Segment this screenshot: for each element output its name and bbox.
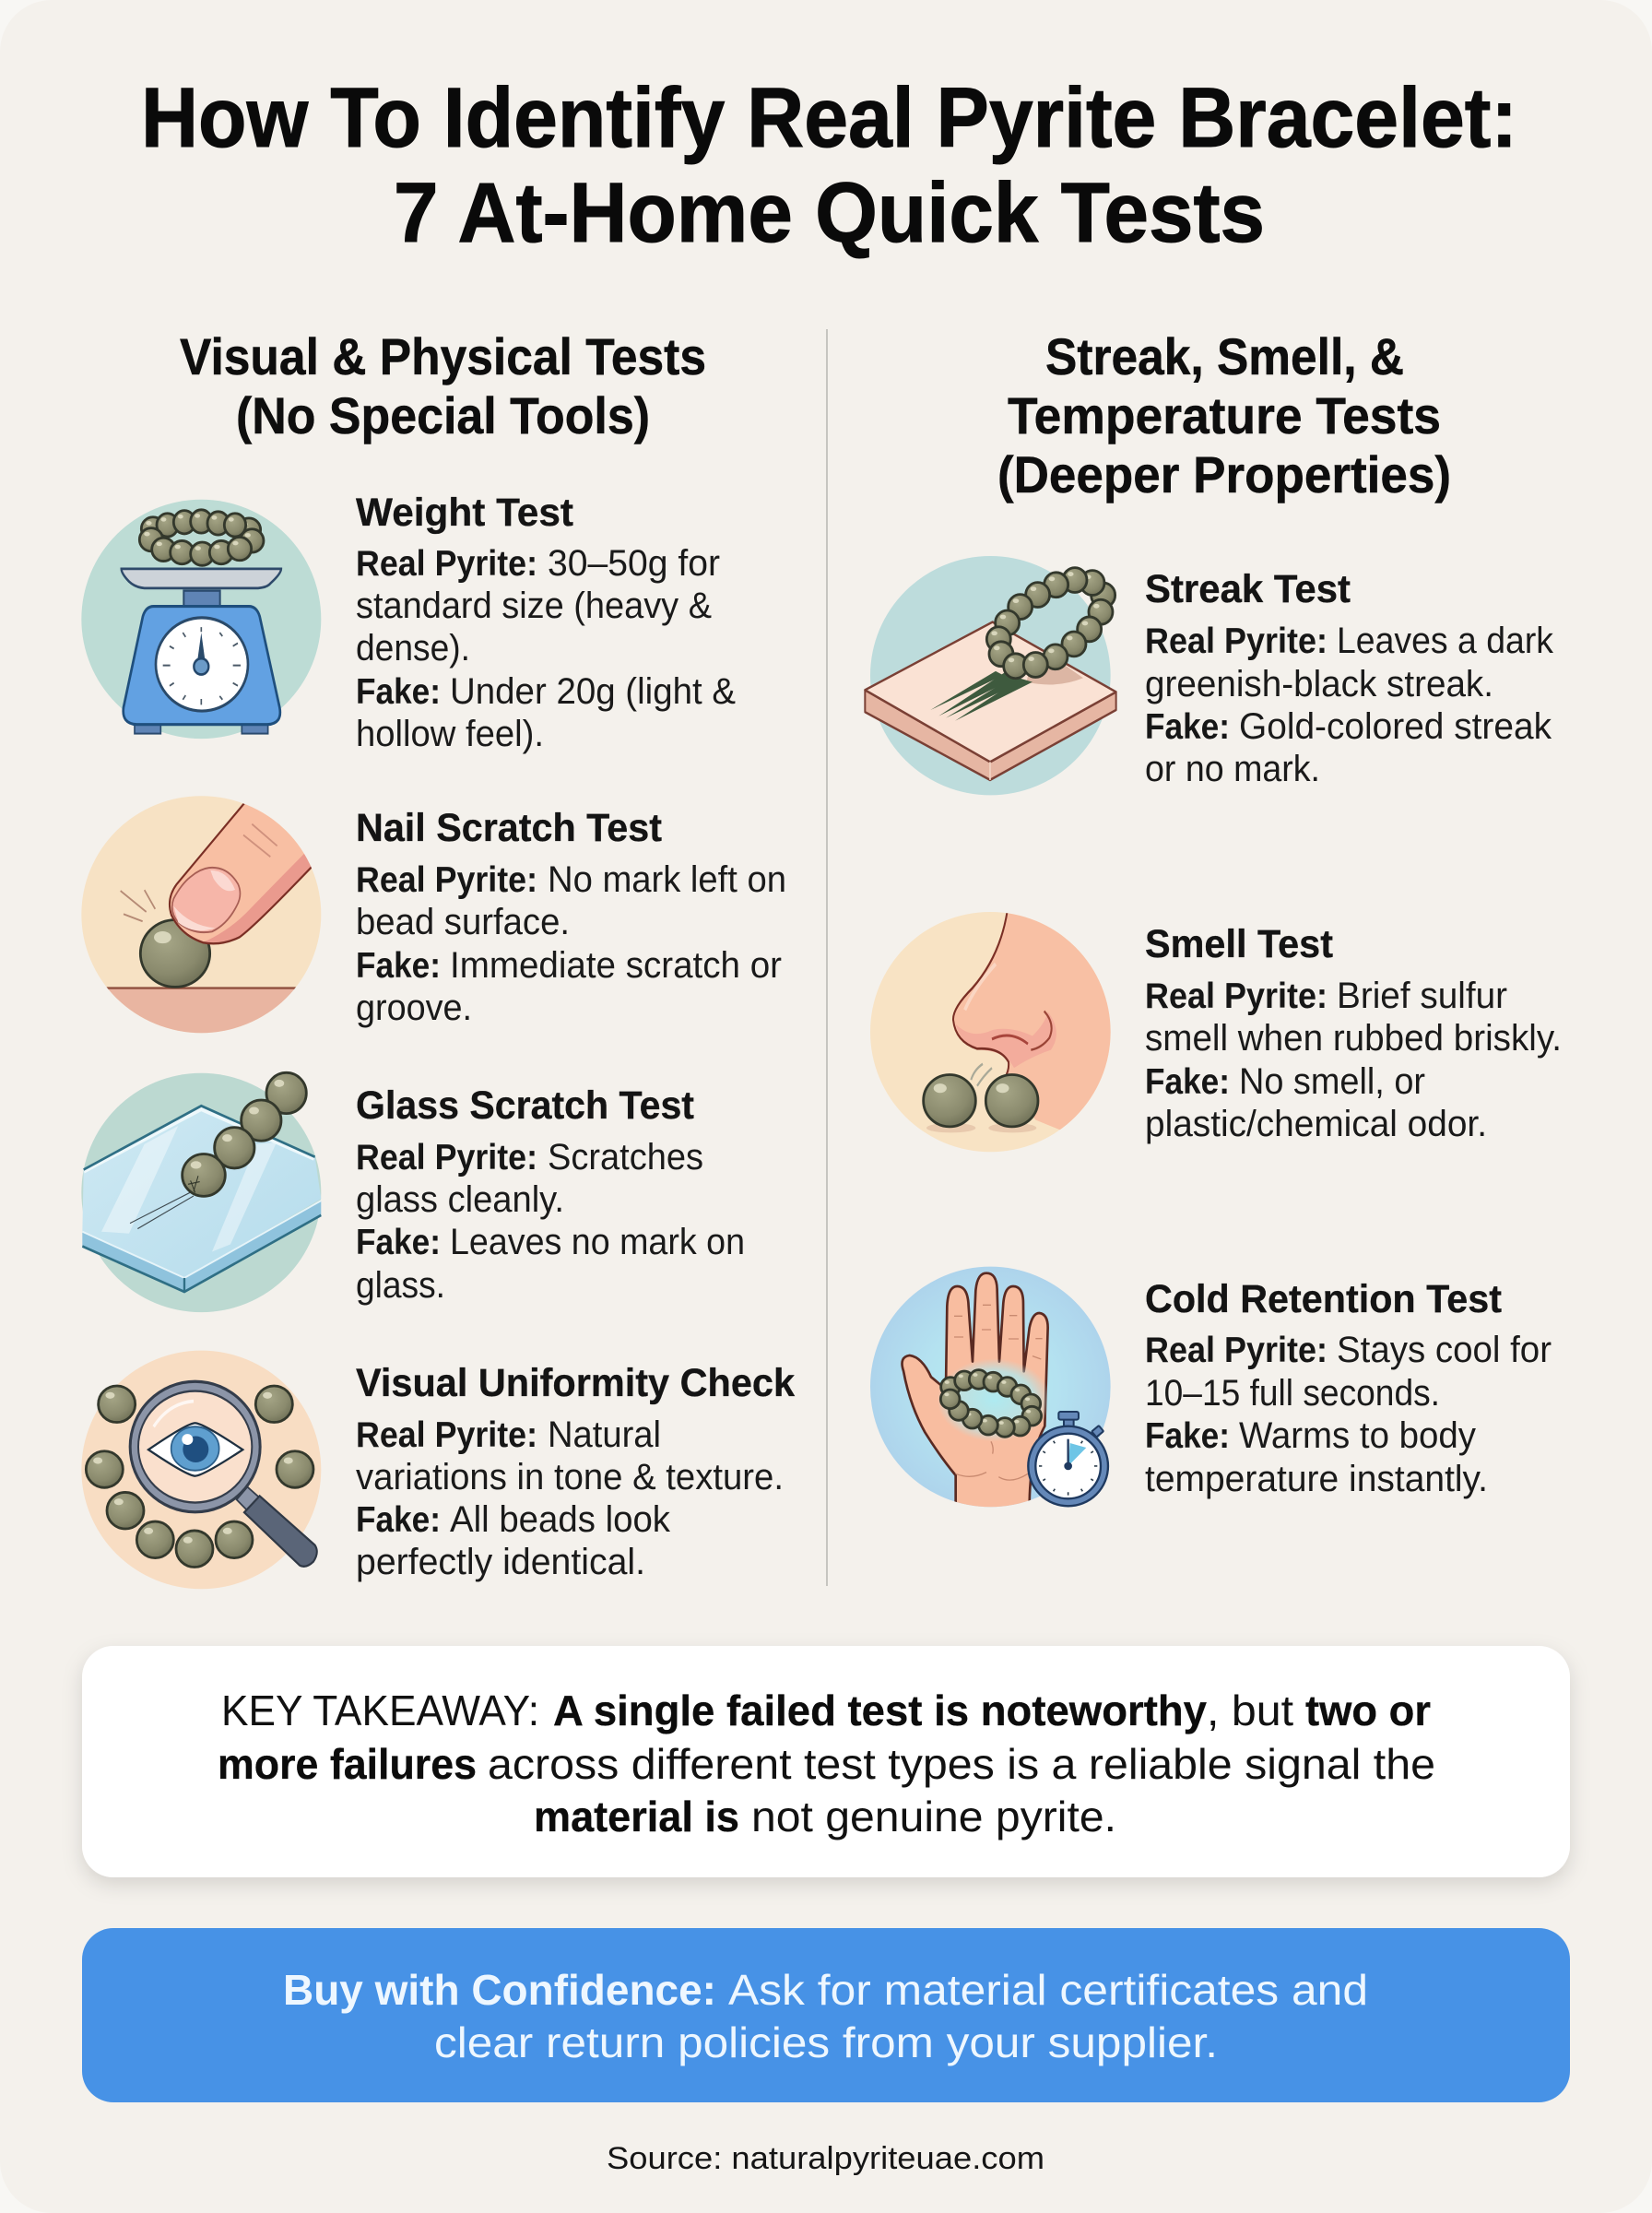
heading: left column: Visual & Physical Tests	[180, 327, 706, 385]
text: streak test: Gold-colored streak	[1239, 706, 1552, 747]
callout: key takeaway: KEY TAKEAWAY:	[221, 1686, 539, 1734]
callout: key takeaway: two or	[1305, 1686, 1431, 1734]
title: How To Identify Real Pyrite Bracelet:	[141, 71, 1517, 165]
text: glass scratch test: Fake:	[356, 1223, 441, 1262]
text: glass scratch test: glass cleanly.	[356, 1179, 564, 1220]
heading: left column	[180, 327, 706, 444]
text: visual uniformity check: Fake:	[356, 1500, 441, 1540]
text: weight test	[356, 491, 736, 754]
text: visual uniformity check: All beads look	[450, 1499, 671, 1540]
text: glass scratch test: Leaves no mark on	[450, 1222, 745, 1262]
icon: bracelet leaving a streak on a tile	[865, 556, 1116, 795]
text: streak test: Fake:	[1145, 707, 1230, 747]
icon: beads scratching glass	[81, 1072, 321, 1312]
text: visual uniformity check: Visual Uniformity Check	[356, 1361, 795, 1405]
text: streak test: Real Pyrite:	[1145, 621, 1328, 661]
callout: key takeaway: material is	[534, 1793, 739, 1840]
callout: key takeaway: not genuine pyrite.	[751, 1793, 1116, 1840]
callout: key takeaway: across different test types is a reliable signal the	[488, 1740, 1435, 1788]
heading: right column: Temperature Tests	[1008, 386, 1441, 444]
text: smell test: No smell, or	[1239, 1061, 1425, 1102]
callout: key takeaway: more failures	[218, 1740, 477, 1788]
text: streak test	[1145, 567, 1554, 789]
callout: buy with confidence: Ask for material certificates and	[728, 1966, 1368, 2014]
text: weight test: Weight Test	[356, 491, 573, 535]
text: cold retention test: Stays cool for	[1337, 1330, 1552, 1370]
text: glass scratch test: Scratches	[548, 1137, 703, 1178]
text: glass scratch test	[356, 1083, 745, 1306]
text: visual uniformity check: Real Pyrite:	[356, 1415, 537, 1455]
text: weight test: Fake:	[356, 672, 441, 712]
title	[141, 71, 1517, 260]
text: glass scratch test: glass.	[356, 1265, 445, 1306]
heading: right column: (Deeper Properties)	[997, 445, 1451, 503]
text: streak test: Leaves a dark	[1337, 621, 1554, 661]
text: nail scratch test: Fake:	[356, 946, 441, 986]
text: weight test: Real Pyrite:	[356, 544, 537, 584]
heading: left column: (No Special Tools)	[236, 386, 650, 444]
text: weight test: hollow feel).	[356, 714, 544, 754]
text: visual uniformity check: variations in tone & texture.	[356, 1457, 784, 1497]
callout: buy with confidence: clear return policies from your supplier.	[434, 2018, 1218, 2066]
text: nail scratch test: Nail Scratch Test	[356, 806, 662, 850]
text: nail scratch test: Real Pyrite:	[356, 860, 537, 900]
text: nail scratch test: No mark left on	[548, 859, 786, 900]
heading: right column: Streak, Smell, &	[1045, 327, 1404, 385]
text: cold retention test: temperature instantly.	[1145, 1459, 1488, 1499]
text: weight test: Under 20g (light &	[450, 671, 736, 712]
text: weight test: 30–50g for	[548, 543, 720, 584]
text: glass scratch test: Real Pyrite:	[356, 1138, 537, 1178]
icon: hand with cold bracelet and stopwatch	[870, 1267, 1111, 1509]
text: cold retention test: Warms to body	[1239, 1415, 1476, 1456]
callout: key takeaway	[82, 1646, 1570, 1877]
text: smell test	[1145, 922, 1562, 1144]
text: smell test: Fake:	[1145, 1062, 1230, 1102]
text: streak test: greenish-black streak.	[1145, 664, 1493, 704]
callout: buy with confidence	[82, 1928, 1570, 2102]
text: nail scratch test: Immediate scratch or	[450, 945, 782, 986]
text: visual uniformity check: perfectly identical.	[356, 1542, 645, 1582]
text: cold retention test: Real Pyrite:	[1145, 1331, 1328, 1370]
title: 7 At-Home Quick Tests	[394, 166, 1265, 260]
callout: buy with confidence: Buy with Confidence:	[283, 1966, 716, 2014]
text: nail scratch test: groove.	[356, 988, 472, 1028]
text: nail scratch test	[356, 806, 786, 1028]
text: cold retention test: Cold Retention Test	[1145, 1277, 1502, 1321]
text: streak test: or no mark.	[1145, 749, 1320, 789]
text: cold retention test	[1145, 1277, 1552, 1499]
text: glass scratch test: Glass Scratch Test	[356, 1083, 694, 1128]
text: visual uniformity check	[356, 1361, 795, 1582]
text: streak test: Streak Test	[1145, 567, 1351, 611]
text: weight test: dense).	[356, 628, 470, 669]
text: smell test: Brief sulfur	[1337, 976, 1507, 1016]
icon: magnifying glass with eye and beads	[81, 1351, 321, 1589]
text: smell test: plastic/chemical odor.	[1145, 1104, 1487, 1144]
icon: fingernail pressing bead	[80, 796, 325, 1035]
icon: weighing scale with bracelet	[81, 500, 321, 739]
text: smell test: Smell Test	[1145, 922, 1333, 966]
text: cold retention test: Fake:	[1145, 1416, 1230, 1456]
text: smell test: Real Pyrite:	[1145, 976, 1328, 1016]
callout: key takeaway: , but	[1207, 1686, 1293, 1734]
text: weight test: standard size (heavy &	[356, 586, 712, 626]
text: cold retention test: 10–15 full seconds.	[1145, 1373, 1440, 1414]
source line: Source: naturalpyriteuae.com	[607, 2141, 1044, 2176]
text: smell test: smell when rubbed briskly.	[1145, 1018, 1562, 1059]
text: nail scratch test: bead surface.	[356, 902, 570, 942]
heading: right column	[997, 327, 1451, 503]
text: visual uniformity check: Natural	[548, 1414, 661, 1455]
icon: nose smelling beads	[870, 904, 1125, 1156]
callout: key takeaway: A single failed test is noteworthy	[553, 1686, 1207, 1734]
